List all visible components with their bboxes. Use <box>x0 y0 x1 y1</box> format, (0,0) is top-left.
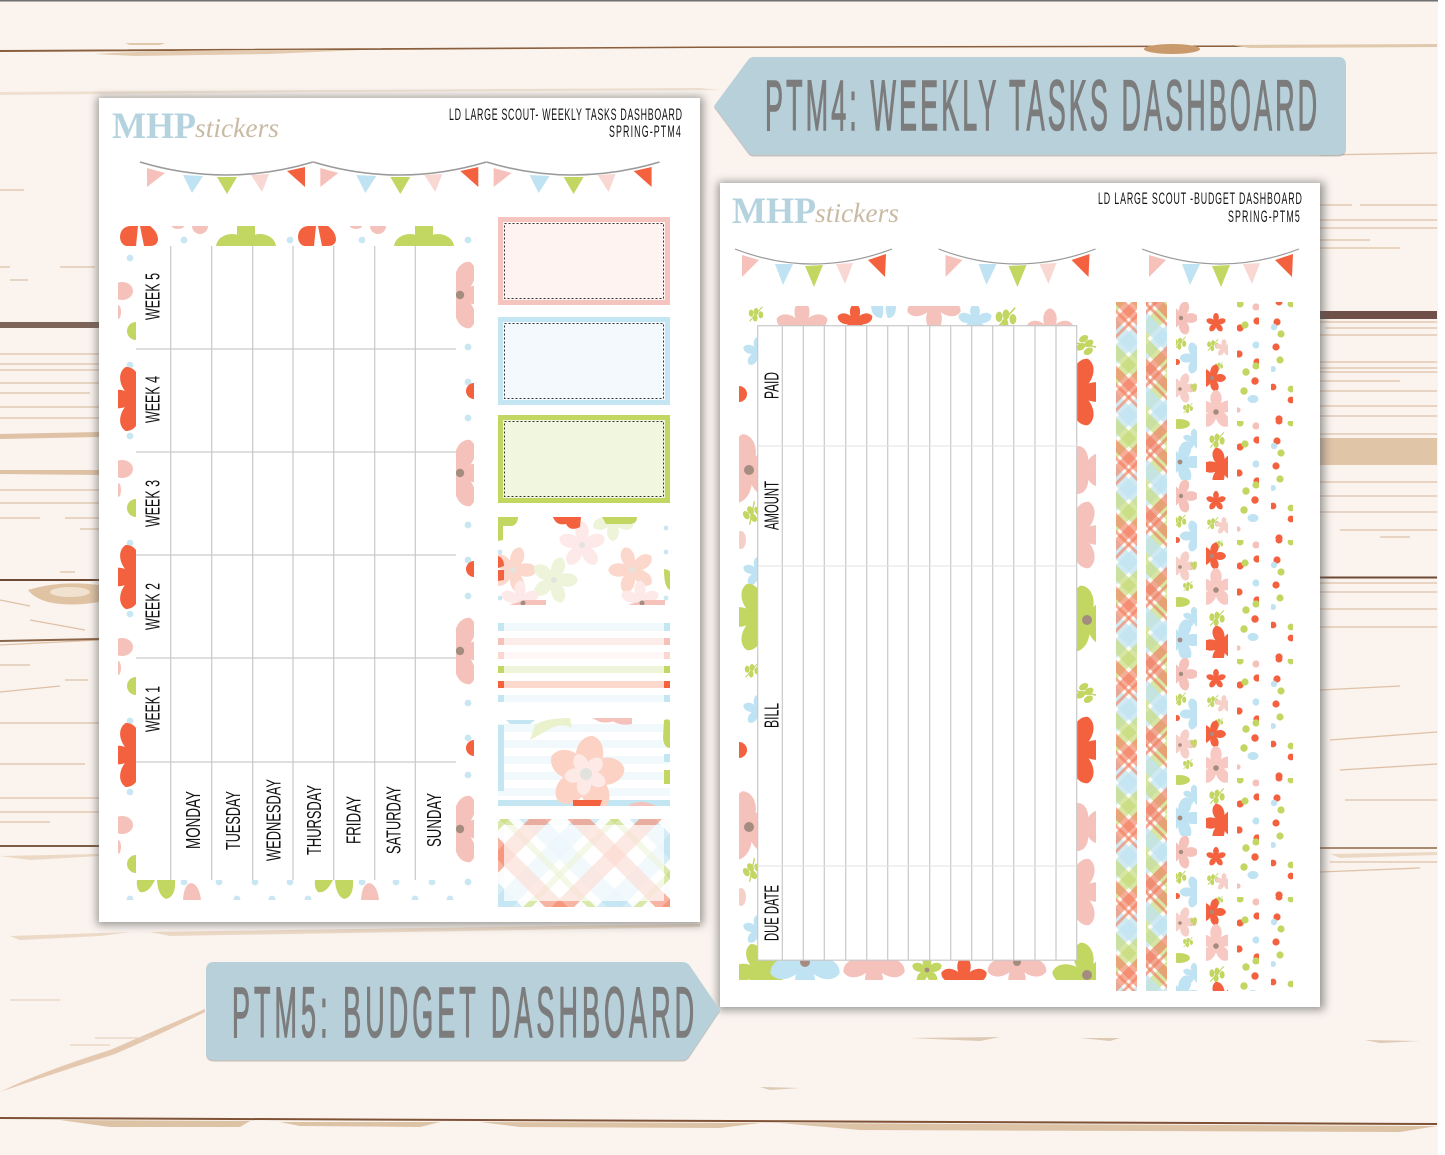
sheet title <box>1098 189 1302 226</box>
logo: MHP stickers: stickers <box>815 198 899 228</box>
day labels: TUESDAY <box>223 791 245 850</box>
washi strip: florals one <box>1176 302 1197 991</box>
logo: MHP stickers <box>732 191 899 232</box>
column labels <box>761 372 783 941</box>
column labels: AMOUNT <box>761 481 783 530</box>
logo: MHP stickers: stickers <box>195 113 279 143</box>
sheet title: SPRING-PTM5 <box>1228 207 1300 226</box>
banner: PTM4 weekly tasks dashboard: PTM4: WEEKLY TASKS DASHBOARD <box>765 67 1317 146</box>
sticker: blue note box <box>498 317 670 405</box>
weekly grid <box>136 246 456 880</box>
washi strip: plaid one <box>1116 302 1137 991</box>
washi strip: florals two <box>1206 302 1228 991</box>
banner: PTM5 budget dashboard: PTM5: BUDGET DASHBOARD <box>232 974 694 1053</box>
bunting garland <box>735 249 1299 287</box>
day labels: SATURDAY <box>384 786 406 854</box>
week labels: WEEK 2 <box>142 583 164 630</box>
logo: MHP stickers: MHP <box>732 191 816 232</box>
sticker: green note box <box>498 415 670 503</box>
week labels: WEEK 3 <box>142 480 164 527</box>
column labels: BILL <box>761 703 783 728</box>
day labels: FRIDAY <box>344 796 366 844</box>
logo: MHP stickers <box>112 106 279 147</box>
bunting garland <box>140 162 660 194</box>
week labels <box>142 273 164 732</box>
day labels: THURSDAY <box>304 785 326 855</box>
floral frame <box>739 306 1096 980</box>
sticker: large flower box <box>498 718 670 814</box>
day labels: WEDNESDAY <box>264 779 286 861</box>
floral frame <box>118 226 474 900</box>
sheet title: LD LARGE SCOUT -BUDGET DASHBOARD <box>1098 189 1302 208</box>
week labels: WEEK 5 <box>142 273 164 320</box>
sticker sheet: PTM4 weekly tasks <box>92 97 703 925</box>
logo: MHP stickers: MHP <box>112 106 196 147</box>
sticker: stripes <box>498 623 670 702</box>
day labels: SUNDAY <box>424 793 446 847</box>
sticker: pink note box <box>498 217 670 305</box>
budget grid <box>758 326 1077 960</box>
week labels: WEEK 4 <box>142 376 164 423</box>
column labels: DUE DATE <box>761 885 783 941</box>
sheet title <box>449 105 682 141</box>
washi strip: dots two <box>1271 302 1293 991</box>
washi strip: plaid two <box>1146 302 1167 991</box>
sticker sheet: PTM5 budget <box>705 182 1324 1017</box>
day labels: MONDAY <box>183 791 205 849</box>
week labels: WEEK 1 <box>142 686 164 732</box>
sticker: pale floral box <box>498 517 670 605</box>
sheet title: LD LARGE SCOUT- WEEKLY TASKS DASHBOARD <box>449 105 682 124</box>
banner: PTM4 weekly tasks dashboard <box>714 57 1346 156</box>
column labels: PAID <box>761 372 783 399</box>
sheet title: SPRING-PTM4 <box>609 122 681 141</box>
washi strip: dots one <box>1237 302 1259 991</box>
sticker: plaid box <box>498 819 670 907</box>
day labels <box>183 779 446 861</box>
